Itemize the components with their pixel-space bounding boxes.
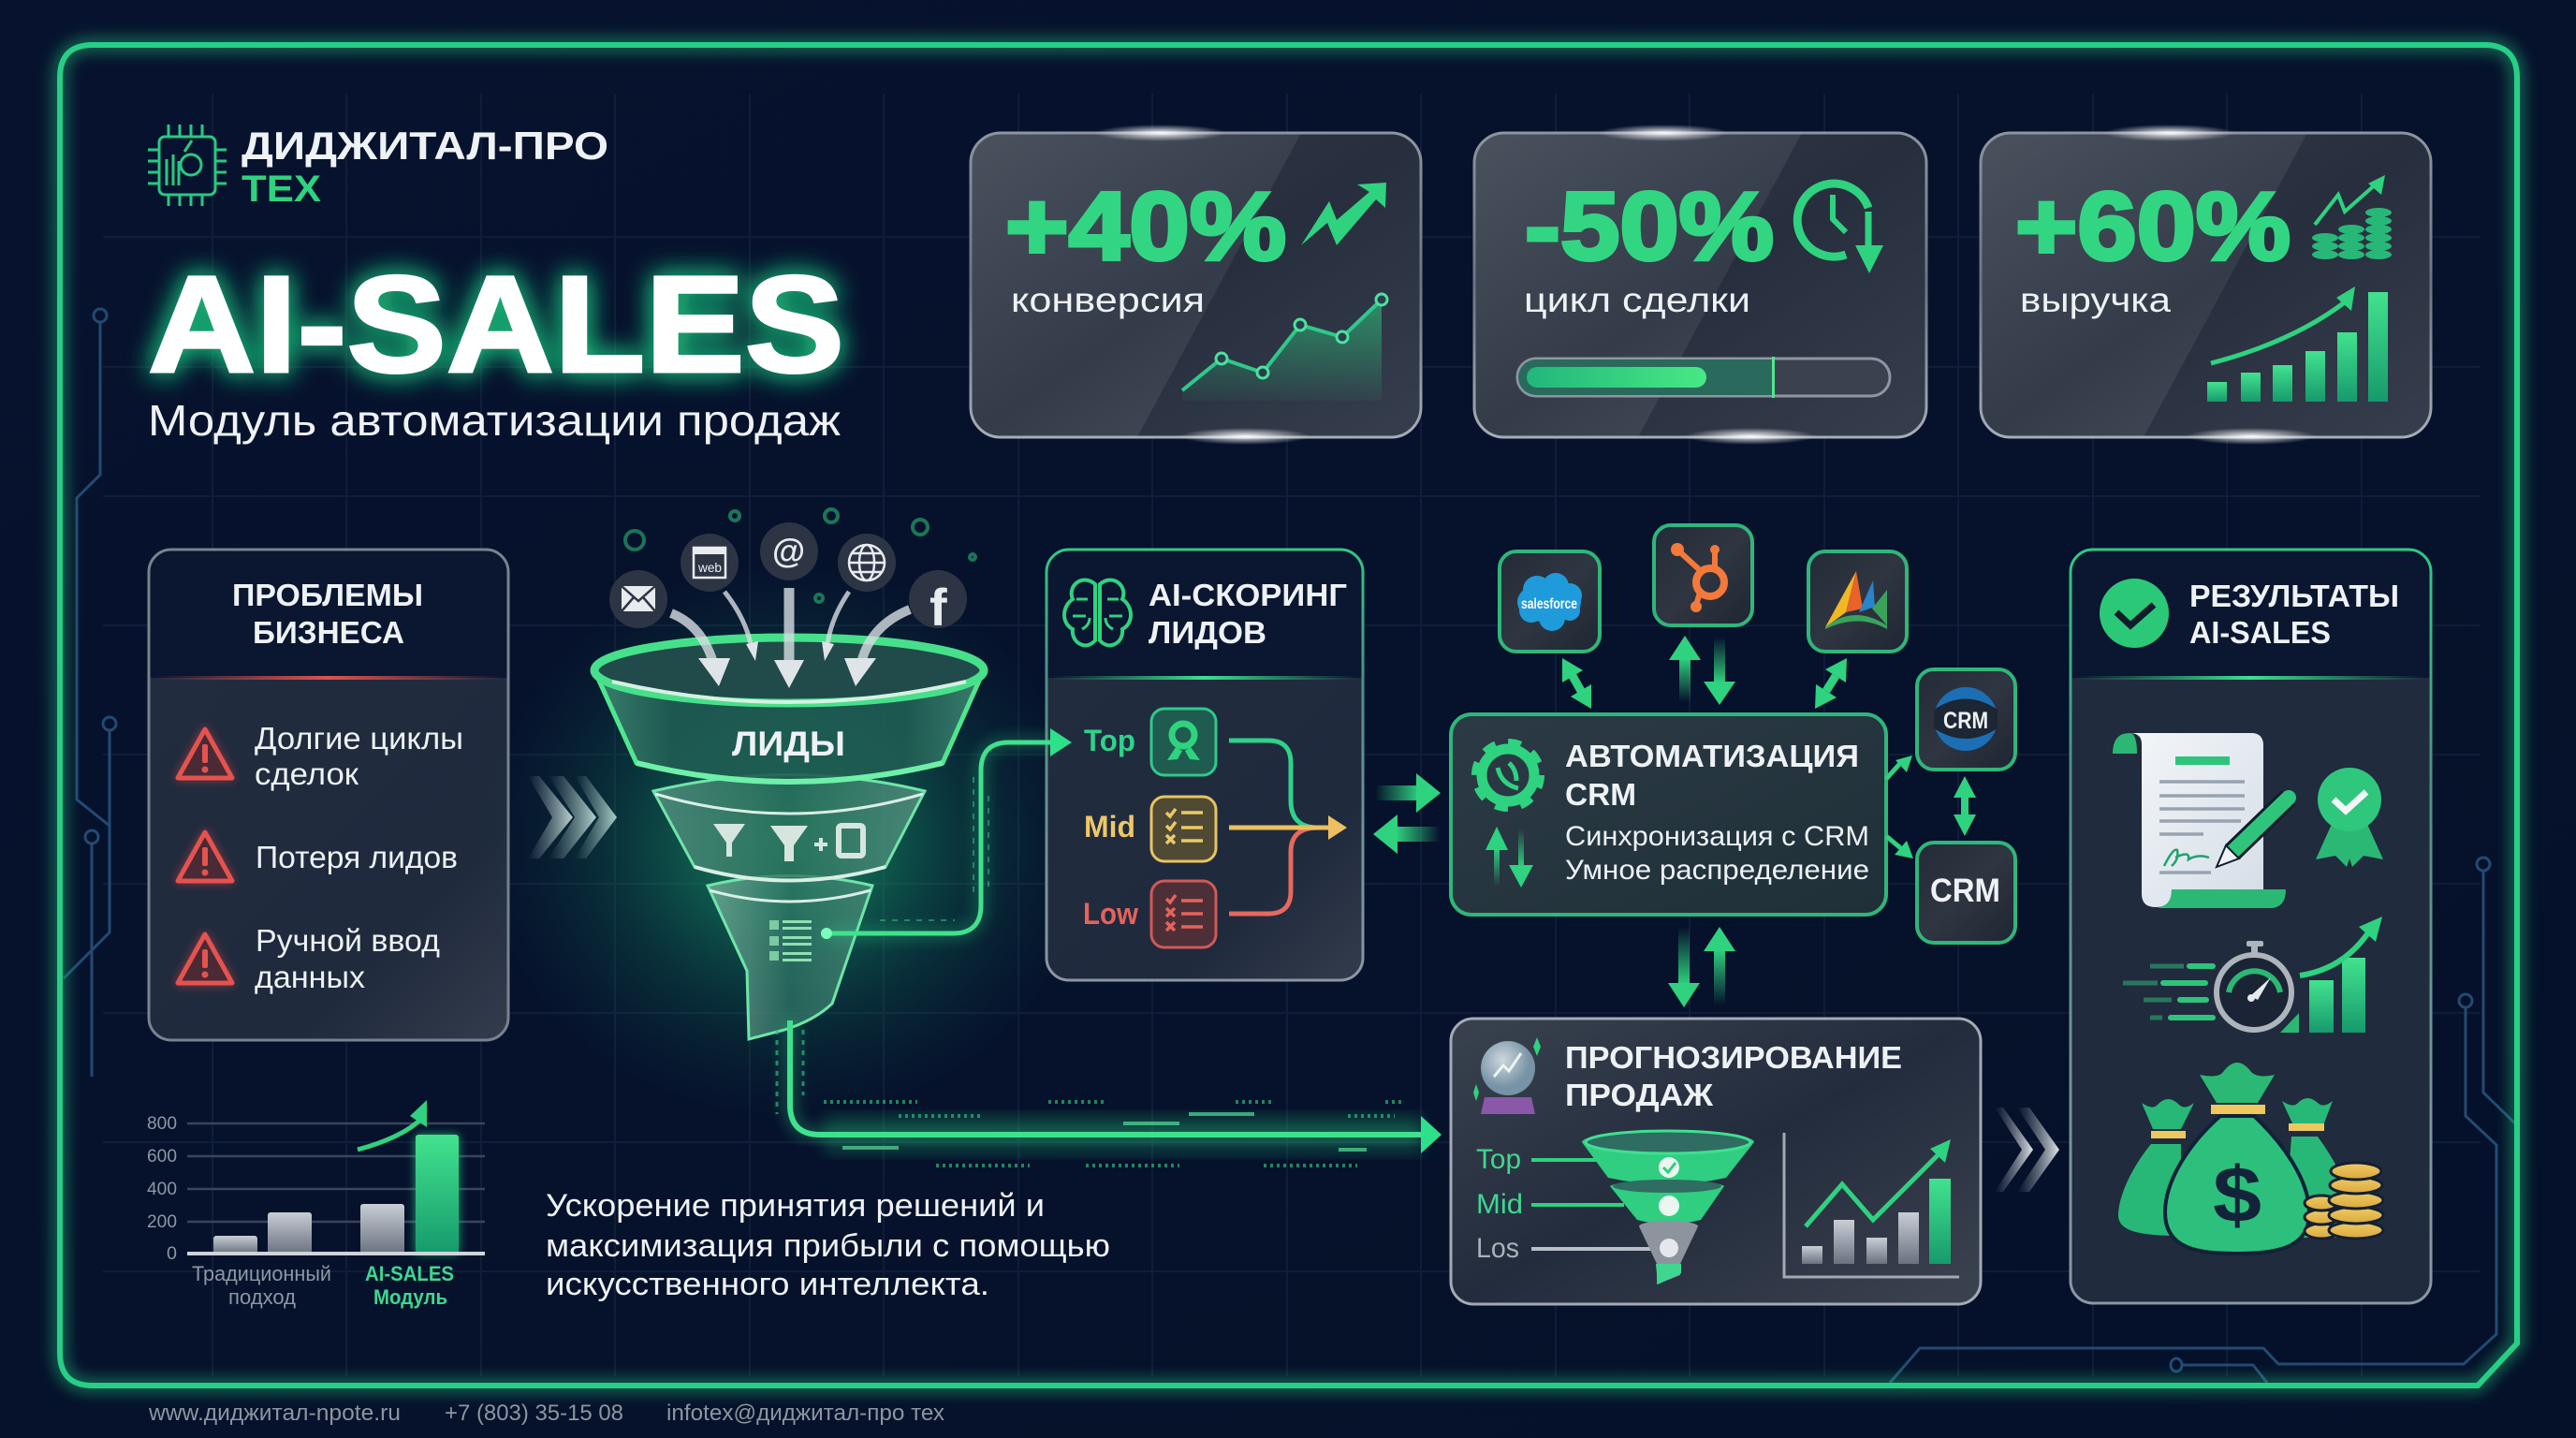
icon: badge <box>2316 768 2383 867</box>
icon: facebook <box>909 570 967 637</box>
label: конверсия <box>1011 281 1205 319</box>
comparison bar chart: подход <box>228 1285 296 1309</box>
icon: gear <box>1477 744 1539 806</box>
comparison bar chart: 0 <box>167 1244 177 1264</box>
logo <box>148 124 608 210</box>
funnel stage 2 <box>653 775 925 880</box>
tagline text: Ускорение принятия решений и <box>546 1188 1045 1224</box>
icon: globe <box>838 534 896 592</box>
merge lines <box>1229 741 1347 914</box>
subtitle: Модуль автоматизации продаж <box>148 396 841 445</box>
heading: БИЗНЕСА <box>253 615 404 650</box>
heading <box>1149 578 1347 650</box>
problem: lost leads <box>178 832 458 881</box>
value: +60% <box>2015 172 2291 280</box>
tile: HubSpot <box>1654 525 1752 625</box>
label: выручка <box>2020 281 2171 319</box>
heading: ПРОДАЖ <box>1565 1078 1713 1112</box>
tier: top: Top <box>1084 724 1135 757</box>
icon: facebook: f <box>929 578 947 637</box>
heading: AI-SALES <box>2189 615 2331 650</box>
comparison bar chart <box>147 1100 485 1309</box>
connector: funnel to scoring <box>821 728 1072 939</box>
sparkline <box>1182 294 1387 401</box>
icon: brain <box>1064 580 1131 645</box>
footer contacts: +7 (803) 35-15 08 <box>445 1401 623 1426</box>
value: +40% <box>1005 172 1286 280</box>
footer contacts <box>148 1401 944 1426</box>
icon: contract <box>2113 733 2289 908</box>
icon: coins with arrow <box>2312 175 2392 259</box>
arrow: chevrons to funnel <box>528 776 617 858</box>
comparison bar chart: 200 <box>147 1212 177 1232</box>
progress bar <box>1517 357 1890 398</box>
heading: АВТОМАТИЗАЦИЯ <box>1565 739 1859 773</box>
icon: trend arrow <box>1301 183 1386 245</box>
tier: low: Low <box>1083 897 1138 931</box>
tile: Salesforce <box>1500 551 1600 652</box>
icon: money bags <box>2118 1063 2383 1254</box>
tagline text: максимизация прибыли с помощью <box>546 1228 1110 1264</box>
icon: at <box>760 522 818 580</box>
icon: web <box>681 534 739 592</box>
heading: AI-СКОРИНГ <box>1149 578 1347 612</box>
panel: sales forecasting <box>1451 1019 1981 1304</box>
problem: long cycles: Долгие циклы <box>255 721 463 756</box>
heading: ПРОГНОЗИРОВАНИЕ <box>1565 1040 1902 1075</box>
tile: Salesforce: salesforce <box>1521 596 1577 612</box>
icon: at: @ <box>772 532 805 570</box>
funnel tiers: Los <box>1476 1233 1519 1264</box>
title: AI-SALES <box>148 248 844 402</box>
heading: CRM <box>1565 777 1636 812</box>
tile: Dynamics <box>1808 551 1907 652</box>
heading <box>1565 739 1859 812</box>
arrows: scoring and CRM exchange <box>1373 773 1441 854</box>
arrows into funnel <box>671 588 910 688</box>
panel: AI lead scoring <box>1046 550 1363 980</box>
label: цикл сделки <box>1524 281 1750 319</box>
funnel stage 3 <box>708 876 872 1039</box>
heading: РЕЗУЛЬТАТЫ <box>2189 579 2399 613</box>
problem: manual input: данных <box>255 960 366 994</box>
panel: CRM automation <box>1451 714 1886 915</box>
value: -50% <box>1525 172 1774 280</box>
icon: clock with arrow <box>1797 183 1883 273</box>
tile: CRM <box>1917 843 2015 943</box>
funnel tiers: Mid <box>1476 1189 1523 1220</box>
funnel glow <box>480 562 1098 1123</box>
body text <box>1565 821 1869 886</box>
tier: top <box>1084 709 1216 775</box>
company name accent: ТЕХ <box>242 169 321 210</box>
circuit traces left <box>64 309 116 1077</box>
tile: CRM globe: CRM <box>1943 708 1988 734</box>
icon: web: web <box>697 560 722 575</box>
comparison bar chart: 600 <box>147 1147 177 1167</box>
funnel tiers: Top <box>1476 1144 1521 1175</box>
problem: manual input <box>178 923 440 994</box>
tier: low <box>1083 881 1216 947</box>
icon: money bags: $ <box>2213 1151 2261 1239</box>
funnel tiers <box>1476 1131 1754 1284</box>
KPI card: conversion <box>971 125 1421 445</box>
connector: funnel to forecast <box>777 1020 1442 1166</box>
body text: Синхронизация с CRM <box>1565 821 1869 852</box>
body text: Умное распределение <box>1565 855 1869 886</box>
bar chart <box>2207 286 2388 402</box>
KPI card: deal cycle <box>1474 125 1926 445</box>
icon: stopwatch with growth <box>2123 917 2382 1033</box>
heading <box>2189 579 2399 650</box>
icon: check <box>2100 579 2169 648</box>
problem: long cycles <box>178 721 463 791</box>
forecast chart <box>1784 1133 1959 1277</box>
arrows: CRM integrations <box>1562 636 1976 1007</box>
circuit traces right <box>1890 858 2515 1383</box>
lead sources <box>609 509 975 637</box>
funnel <box>594 588 984 1039</box>
comparison bar chart: AI-SALES <box>365 1262 454 1285</box>
problem: lost leads: Потеря лидов <box>256 840 458 874</box>
heading: ПРОБЛЕМЫ <box>232 578 423 612</box>
tile: CRM: CRM <box>1930 873 2000 909</box>
panel: business problems <box>149 550 508 1040</box>
footer contacts: infotex@диджитал-про тех <box>666 1401 944 1426</box>
problem: long cycles: сделок <box>255 756 359 791</box>
icon: sync arrows <box>1486 827 1533 888</box>
company name: ДИДЖИТАЛ-ПРО <box>242 124 608 168</box>
heading: ЛИДОВ <box>1149 615 1266 650</box>
panel: results <box>2071 550 2431 1303</box>
tile: CRM globe <box>1917 669 2015 770</box>
tagline text: искусственного интеллекта. <box>546 1267 989 1302</box>
tagline text <box>546 1188 1110 1302</box>
footer contacts: www.диджитал-npote.ru <box>148 1401 401 1426</box>
tier: mid: Mid <box>1084 810 1135 844</box>
funnel label: ЛИДЫ <box>732 725 845 763</box>
comparison bar chart: Модуль <box>373 1285 447 1309</box>
icon: chip <box>148 125 227 206</box>
funnel stage 1 <box>594 638 984 782</box>
arrow: chevrons to results <box>1995 1108 2059 1192</box>
comparison bar chart: 400 <box>147 1180 177 1199</box>
tier: mid <box>1084 797 1216 861</box>
problem: manual input: Ручной ввод <box>256 923 440 958</box>
comparison bar chart: 800 <box>147 1114 177 1134</box>
heading <box>1565 1040 1902 1112</box>
comparison bar chart: Традиционный <box>192 1262 331 1285</box>
icon: crystal ball <box>1473 1037 1541 1114</box>
heading <box>232 578 423 650</box>
KPI card: revenue <box>1981 125 2431 445</box>
icon: mail <box>609 570 667 628</box>
